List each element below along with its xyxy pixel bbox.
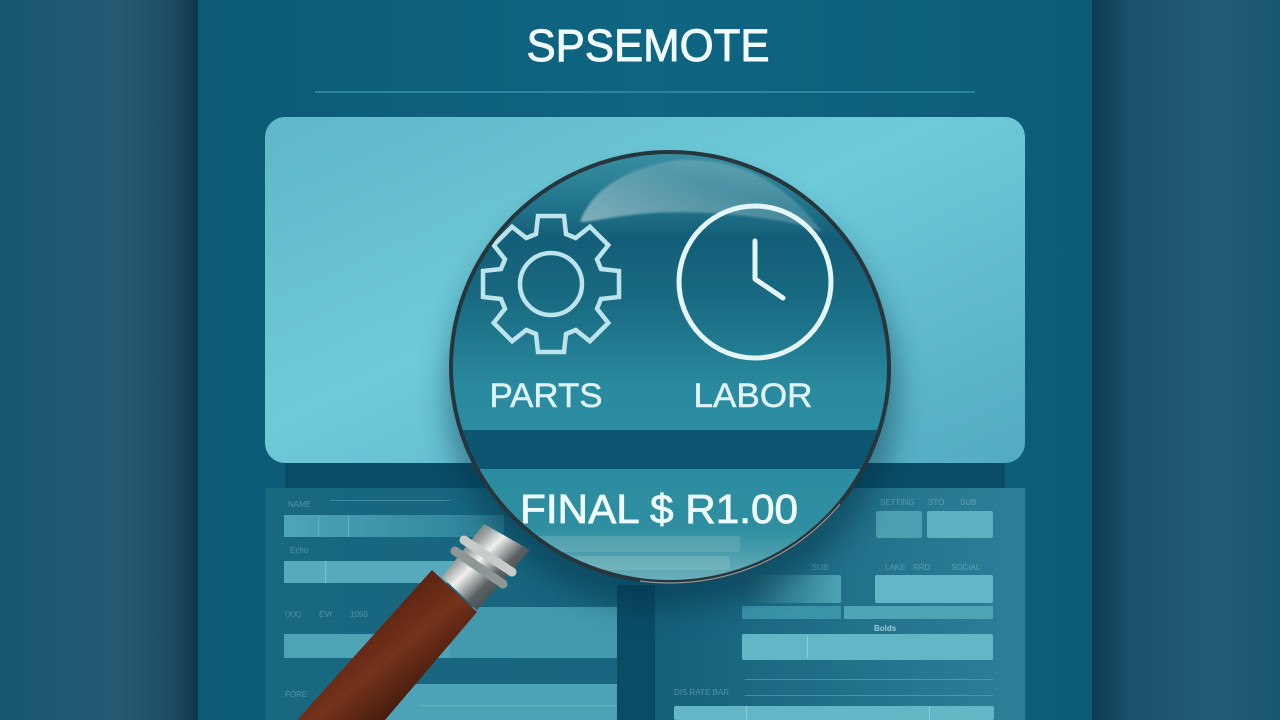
lens glass <box>452 153 888 581</box>
left form field 3: (XX) <box>285 610 301 619</box>
metal collar rings <box>455 540 512 584</box>
document page <box>198 0 1092 720</box>
dark gutter between lower panels <box>617 585 655 720</box>
metal neck <box>442 524 530 610</box>
magnified bars <box>520 536 740 570</box>
right form field row 3 <box>742 606 993 619</box>
right form labels: DIS RATE BAR <box>674 688 729 697</box>
final price: FINAL $ R1.00 <box>520 486 798 532</box>
left form field 1: NAME <box>288 500 311 509</box>
right form labels: RRD <box>913 563 931 572</box>
left form field 1 <box>284 500 504 537</box>
left form field 4 <box>285 684 617 720</box>
right form rules <box>745 679 993 696</box>
dark band under top panel <box>285 463 1005 488</box>
right background column <box>1092 0 1280 720</box>
right form labels: SOCIAL <box>951 563 981 572</box>
right form labels <box>674 498 981 697</box>
right form labels: Bolds <box>874 624 897 633</box>
title: SPSEMOTE <box>526 20 770 71</box>
right form field row 2 <box>742 575 993 603</box>
right form labels: SUB <box>960 498 976 507</box>
label: parts: PARTS <box>490 377 602 415</box>
right form field row 1 <box>876 511 993 538</box>
magnifier lens <box>440 151 900 583</box>
right form labels: SETTING <box>880 498 915 507</box>
right form labels: LAKE <box>885 563 905 572</box>
title divider <box>315 91 975 93</box>
left form field 2: Echo <box>290 546 309 555</box>
lens rim highlight <box>640 504 840 584</box>
wooden grip <box>297 570 477 720</box>
dark band <box>440 430 900 469</box>
magnifying glass handle <box>297 524 530 720</box>
icon: gear <box>483 216 619 352</box>
right form field row 5 <box>674 706 994 720</box>
shadow of magnifier <box>446 174 898 610</box>
right form labels: SUB <box>812 563 828 572</box>
right form field row 4 <box>742 634 993 660</box>
right form labels: STO <box>928 498 944 507</box>
left background column <box>0 0 198 720</box>
left form field 3: 1050 <box>350 610 368 619</box>
lens contents <box>440 160 900 570</box>
left form field 4: FORE <box>285 690 307 699</box>
left form field 2 <box>284 546 474 583</box>
lens rim <box>451 152 889 582</box>
lower right form panel <box>655 488 1025 720</box>
left form field 3: EVI <box>319 610 332 619</box>
label: labor: LABOR <box>694 377 812 415</box>
lower left form panel <box>265 488 617 720</box>
icon: clock <box>679 206 831 358</box>
top panel <box>265 117 1025 463</box>
left form field 3 <box>284 607 617 658</box>
glass highlight <box>580 160 822 232</box>
